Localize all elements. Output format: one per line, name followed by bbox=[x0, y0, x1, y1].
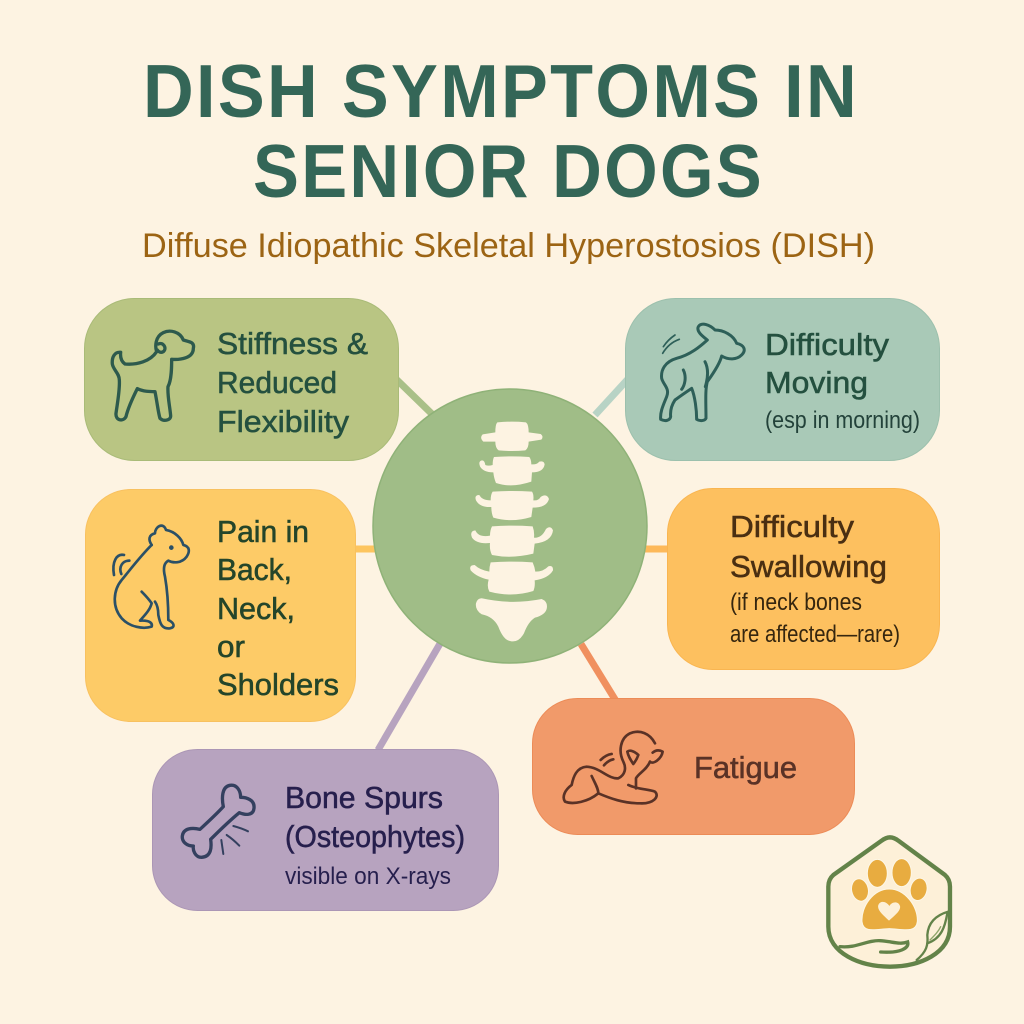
central circle with spine bbox=[373, 389, 647, 663]
text: difficulty swallowing bbox=[730, 509, 900, 648]
panel: bone spurs bbox=[152, 750, 498, 910]
icon: moving dog bbox=[661, 324, 744, 421]
text: bone spurs: (Osteophytes) bbox=[285, 819, 465, 854]
text: difficulty swallowing: Swallowing bbox=[730, 549, 887, 584]
panel: difficulty moving bbox=[626, 298, 940, 460]
text: pain: Back, bbox=[217, 552, 292, 587]
text: stiffness bbox=[217, 326, 368, 439]
text: difficulty moving bbox=[765, 327, 920, 434]
text: difficulty swallowing: Difficulty bbox=[730, 509, 855, 544]
text: difficulty moving: Moving bbox=[765, 365, 868, 400]
text: pain: Pain in bbox=[217, 514, 309, 549]
panel: fatigue bbox=[532, 698, 854, 834]
text: difficulty moving: Difficulty bbox=[765, 327, 890, 362]
icon: spine vertebrae bbox=[470, 422, 553, 641]
text: stiffness: Flexibility bbox=[217, 404, 350, 439]
connector lines bbox=[350, 379, 672, 750]
text: pain: Neck, bbox=[217, 591, 295, 626]
panel: stiffness bbox=[84, 298, 398, 460]
text: fatigue: Fatigue bbox=[694, 750, 797, 785]
icon: stiff dog bbox=[112, 331, 194, 420]
text: pain: or bbox=[217, 629, 245, 664]
title: SENIOR DOGS bbox=[253, 129, 764, 213]
icon: sitting dog bbox=[113, 526, 189, 628]
logo: paw in house badge bbox=[828, 837, 950, 967]
text: difficulty swallowing: are affected—rare) bbox=[730, 621, 900, 648]
title: DISH SYMPTOMS IN bbox=[143, 49, 859, 133]
text: difficulty swallowing: (if neck bones bbox=[730, 589, 862, 616]
title bbox=[143, 49, 859, 213]
subtitle: Diffuse Idiopathic Skeletal Hyperostosios (DISH) bbox=[142, 227, 875, 265]
text: bone spurs: visible on X-rays bbox=[285, 863, 451, 890]
text: bone spurs bbox=[285, 780, 465, 890]
text: difficulty moving: (esp in morning) bbox=[765, 407, 920, 434]
icon: bone with spurs bbox=[182, 785, 254, 857]
text: pain: Sholders bbox=[217, 667, 339, 702]
text: bone spurs: Bone Spurs bbox=[285, 780, 443, 815]
panel: difficulty swallowing bbox=[668, 488, 940, 670]
text: stiffness: Reduced bbox=[217, 365, 337, 400]
icon: resting dog bbox=[564, 732, 663, 803]
text: pain bbox=[217, 514, 339, 702]
text: stiffness: Stiffness & bbox=[217, 326, 368, 361]
panel: pain bbox=[86, 490, 356, 722]
